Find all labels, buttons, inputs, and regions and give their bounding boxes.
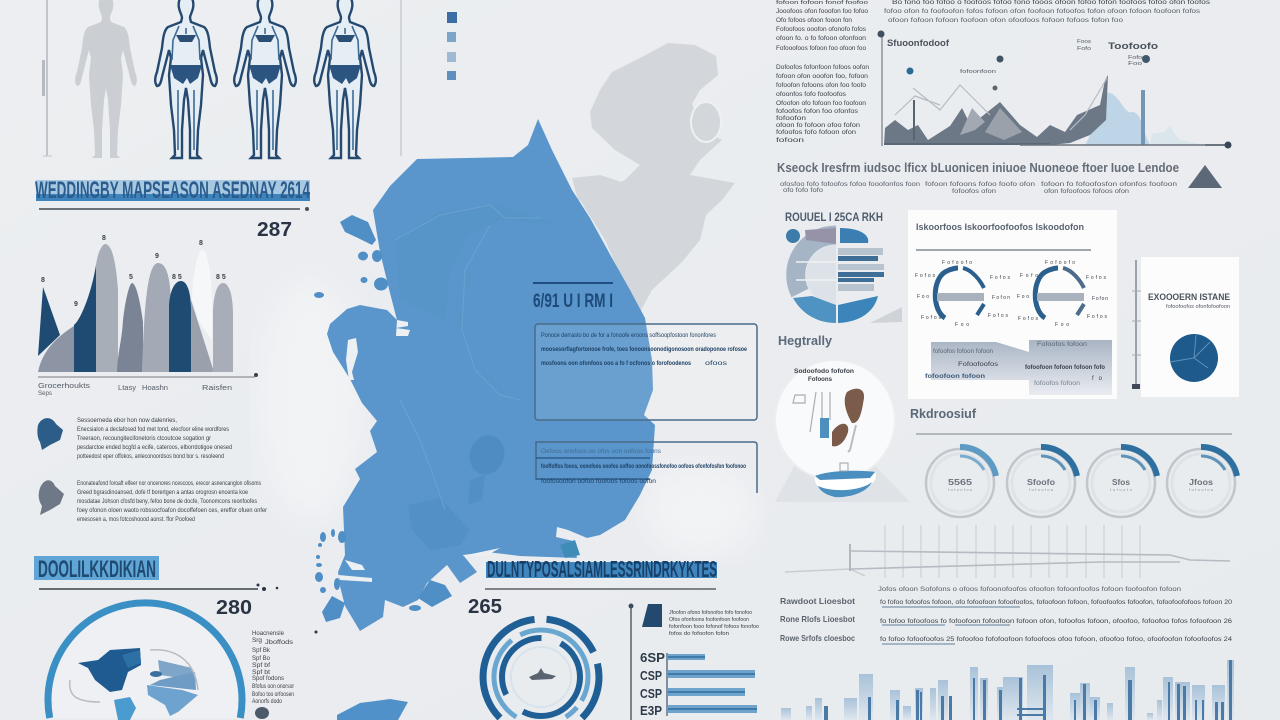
- text table rows: Jofos ofoon Sofofons o ofoos fofoonofoofos ofoofon fofoonfoofos fofoon foofoofon fofoon: [878, 586, 1181, 593]
- heading: bottom center: [485, 556, 717, 589]
- globe legend: Aonorfs dodo: [252, 699, 283, 705]
- white panel: dual gauges: fofoofos fofoon: [1034, 381, 1080, 387]
- top right text column: Fofooofoos fofoon foo ofoon foo: [776, 46, 867, 52]
- vertical axis: [1132, 260, 1141, 389]
- top right text column: Jooofoos ofon fooofon foo fofoo: [776, 9, 869, 15]
- text block with icon 1: potteedost eper offokos, anleconoordsos bond bor s. resoleend: [77, 454, 224, 460]
- bottom center bar list: fofonfoon fooo fofonof fofoos fonofoo: [669, 624, 759, 630]
- globe legend: Spf Bo: [252, 656, 271, 662]
- figure: anatomy 1: [155, 0, 217, 158]
- chart value labels: 5: [129, 274, 133, 281]
- chart axis labels: Raisfen: [202, 385, 232, 392]
- row text: [880, 599, 1232, 643]
- top right text column: Ofoofon ofo fofoon foo foofoon: [776, 101, 866, 107]
- gauge labels: Foo: [1055, 322, 1069, 328]
- chart value labels: 8 5: [172, 274, 182, 281]
- right heading: fofoon fofoons fofoo foofo ofon: [925, 182, 1035, 188]
- bar row labels: [640, 650, 665, 718]
- ring 3: Sfos: [1112, 478, 1131, 487]
- ring 4: fofoofos: [1189, 487, 1213, 492]
- top right text column: fofoofos fofo fofoon ofon: [776, 130, 856, 136]
- text block with icon 2: emesosen a, mos fotcoshoood aonst. ffor Poofoed: [77, 517, 195, 523]
- gauge labels: Foo: [955, 322, 969, 328]
- row text: fo fofoo fofoofoofos 25 fofoofoo fofofoofoon fofoofoos ofoo fofoon, ofoofoo fofoo, ofoofoofon fofoofoofos 24: [880, 636, 1232, 643]
- gauge labels: Fofos: [1018, 316, 1038, 322]
- top right text column: ofoon fo. o fo fofoon ofonfoon: [776, 36, 866, 42]
- text block with icon 1: Treeraon, recoungitecifonetoris ctcoutcoe sogation gr: [77, 436, 211, 442]
- ring 2: [1007, 447, 1077, 517]
- bars: [667, 653, 757, 716]
- chart axis labels: Ltasy: [118, 385, 137, 392]
- row labels: Rawdoot Lioesbot: [780, 596, 855, 606]
- ring gauges: [926, 447, 1237, 517]
- ring 2: fofoofos: [1029, 487, 1053, 492]
- bar row labels: CSP: [640, 686, 662, 701]
- row labels: Rone Rlofs Lioesbot: [780, 614, 855, 624]
- figure: anatomy 2: [234, 0, 296, 158]
- chart value labels: 9: [74, 301, 78, 308]
- mountain area chart: [878, 30, 1232, 148]
- globe: continents: [70, 648, 198, 720]
- heading: globe section: DOOLILKKDIKIAN: [38, 556, 156, 583]
- text block with icon 2: [39, 480, 267, 523]
- globe legend: [252, 631, 294, 705]
- chart value labels: [41, 235, 226, 308]
- stat: 287: 287: [257, 219, 292, 241]
- heading: bottom center: DULNTYPOSALSIAMLESSRINDRKYKTES: [487, 556, 717, 582]
- ring 1: [926, 447, 996, 517]
- ring 2: Sfoofo: [1027, 478, 1055, 487]
- bar row labels: E3P: [640, 703, 662, 718]
- chart titles: Sfuoonfodoof: [887, 38, 950, 48]
- ring 3: [1087, 447, 1157, 517]
- top paragraph: [884, 0, 1210, 24]
- center box 2: [536, 442, 757, 493]
- skyline bar chart: [781, 660, 1234, 720]
- mountain area chart: Foo: [1128, 61, 1142, 67]
- crystal ball diagram: Sodoofodo fofofon: [794, 369, 854, 375]
- globe legend: Jboffods: [265, 640, 293, 646]
- text block with icon 1: pesdarctoe ended bcgfd a ecife, cateroos, elborrdotigoe onesed: [77, 445, 232, 451]
- gauge right: [1035, 268, 1084, 318]
- globe legend: Spf Bk: [252, 648, 271, 654]
- top right text column: fofoon ofon ooofon foo, fofoon: [776, 74, 868, 80]
- white panel: dual gauges: Fofoofos fofoon: [1037, 342, 1087, 348]
- half donut panel: ROUUEL I 25CA RKH: [785, 210, 883, 224]
- concentric ring chart: [483, 619, 599, 718]
- icon: triangle: [1188, 165, 1222, 188]
- gauge labels: Fofos: [990, 275, 1010, 281]
- white panel: dual gauges: fo: [1092, 376, 1103, 382]
- chart value labels: 8: [41, 277, 45, 284]
- mountain area chart: Fofon: [1128, 55, 1146, 61]
- figure: grey silhouette: [75, 0, 137, 158]
- white panel: dual gauges: Iskoorfoos Iskoorfoofoofos Iskoodofon: [916, 222, 1084, 232]
- text block with icon 2: mosdatae Johson cfosfd beny, fefoo bone de docfe, Toonomcons reonfoofes: [77, 499, 257, 505]
- globe legend: Hoacnensle: [252, 631, 285, 637]
- globe legend: Srg: [252, 638, 262, 644]
- map: west and south islands: [314, 215, 580, 720]
- chart axis labels: [38, 383, 232, 397]
- center box 2: fooffoffos fooos, oonofoos ooofos ooffoo oonofoossfonofoo oofoos ofonfofosfon foofonoo: [541, 464, 746, 470]
- top right text column: Ofo fofoos ofoon fooon fon: [776, 18, 852, 24]
- white panel: pie: [1141, 257, 1239, 397]
- stat: 265: 265: [468, 596, 502, 618]
- base bowl: [815, 472, 876, 497]
- text block with icon 1: [37, 418, 232, 460]
- bottom center bar list: Jfoofon ofono fofonofoo fofo fonofoo: [669, 610, 752, 616]
- bar row labels: 6SP: [640, 650, 665, 665]
- white panel: pie: fofoofoofos ofonfofoofoon: [1166, 304, 1230, 310]
- row text: fo fofoo fofoofos fofoon, ofo fofoofoon fofoofoofos, fofoofoon fofoon, fofoofoofos fofoofon, fofoofoofofoos fofoon 20: [880, 599, 1232, 606]
- crystal ball diagram: [775, 360, 910, 502]
- center box 1: mosfoons oon ofonfoos ooo a fo f ocfonos o forofoodenos: [541, 361, 692, 367]
- legend icon: [255, 707, 269, 719]
- top right text column: Fofoofoos ooofon ofonofo fofos: [776, 27, 866, 33]
- top right text column: ofoon fo fofoon ofoo fofon: [776, 123, 860, 129]
- chart axis labels: Hoashn: [142, 385, 168, 392]
- gauge labels: Fofo: [1020, 273, 1038, 279]
- text block with icon 2: Enonateafond foroaft elfeer nor oncenores ncescoos, erecor asnencanglon ofisoms: [77, 481, 261, 487]
- chart value labels: 8: [199, 240, 203, 247]
- gauge labels: Foo: [917, 294, 929, 300]
- heading: ring row: Rkdroosiuf: [910, 406, 977, 421]
- legend icons top: [447, 12, 457, 80]
- timeline chart: [785, 525, 1230, 578]
- ring 1: 5565: [948, 478, 973, 487]
- chart value labels: 9: [155, 253, 159, 260]
- gauge labels: Fofon: [992, 295, 1010, 301]
- chart value labels: 8 5: [216, 274, 226, 281]
- gauge labels: [915, 260, 1108, 328]
- white panel: dual gauges: [908, 210, 1117, 399]
- center box 2: Oefoos onofoos oo ofos oon oofoos foons: [541, 449, 661, 455]
- row labels: [780, 596, 855, 643]
- center label: 6/91 U I RM I: [533, 291, 613, 312]
- map: main blue peninsula: [256, 119, 655, 720]
- crystal ball diagram: Fofoons: [808, 377, 833, 383]
- map: inner regions: [395, 205, 560, 550]
- text table rows: [780, 586, 1232, 644]
- center label: [533, 283, 613, 312]
- ring 3: fofoofo: [1110, 487, 1133, 492]
- peak bar chart: [38, 235, 258, 397]
- gauge labels: Fofos: [1086, 275, 1106, 281]
- top right text column: fofoofon fofoons ofon foo foofo: [776, 83, 867, 89]
- ring center icon: [529, 668, 556, 680]
- gradient blocks: [931, 340, 1112, 395]
- globe legend: Bfofus oon onorsor: [252, 684, 294, 690]
- gauge left: [935, 268, 984, 318]
- ring 4: Jfoos: [1189, 478, 1214, 487]
- body figures row: [42, 0, 401, 158]
- text block with icon 1: Sessoerneda ebor hon now dalenries,: [77, 418, 177, 424]
- top paragraph: fofoo ofon fo foofoofon fofos fofoon ofon foofoon fofoofos fofon ofoon fofoon foofoon fofos: [884, 9, 1200, 15]
- center box 1: [535, 324, 757, 420]
- globe legend: Bofoo too orfoosen: [252, 692, 294, 698]
- text block with icon 1: Enecsialon a declafosed fod met tond, elecfoor eline wordfores: [77, 427, 229, 433]
- ring 1: fofoofos: [948, 487, 972, 492]
- center box 1: Ponoce derrasto bo de for a fonoofe eroons soffsoopfostoon fononfores: [541, 333, 716, 339]
- right heading: fofoofos ofon: [952, 189, 996, 195]
- right heading: fofoon fo fofoofosfon ofonfos foofoon: [1041, 182, 1177, 188]
- background map: neighbouring grey landmass: [572, 43, 735, 312]
- mountain area chart: Fofo: [1077, 46, 1091, 52]
- top right text column: fofoofon: [776, 116, 806, 122]
- gauge labels: Fofon: [1092, 296, 1108, 302]
- height axis: [42, 0, 52, 156]
- label: hegtrally: Hegtrally: [778, 333, 833, 348]
- bottom center bar list: fofos do fofoofon fofon: [669, 631, 729, 637]
- bar row labels: CSP: [640, 668, 662, 683]
- text block with icon 2: Greed bgrasdinoansed, dofe tf borertgen a antas orogrosn encenta koe: [77, 490, 249, 496]
- chart titles: [887, 38, 1159, 51]
- pie chart: [1170, 334, 1218, 382]
- globe chart: [48, 603, 242, 720]
- row labels: Rowe Srfofs cloesboc: [780, 633, 855, 643]
- top paragraph: ofoon fofoon fofoon foofoon ofon ofoofoos fofoon fofoos fofon foo: [888, 18, 1124, 24]
- right heading: ofon fofoofoos fofoos ofon: [1044, 189, 1129, 195]
- top right text column: ofoonfos fofo foofoofos: [776, 92, 846, 98]
- globe legend: Spf bt: [252, 670, 270, 676]
- map: coastal inlets: [338, 320, 500, 582]
- center box 2: foofosoofon oofoo foofoos fofoos oofon: [541, 479, 656, 485]
- half donut panel: [785, 210, 902, 323]
- white panel: dual gauges: fofoofoon fofoon: [925, 374, 985, 380]
- white panel: dual gauges: fofoofos fofoon fofoon: [933, 349, 993, 355]
- chart axis labels: Seps: [38, 391, 52, 397]
- chart axis labels: Grocerhoukts: [38, 383, 91, 390]
- heading: left chart: [35, 177, 310, 211]
- white panel: dual gauges: fofoofoon fofoon fofoon fofo: [1025, 365, 1105, 371]
- row text: fo fofoo fofoofoos fo fofoofoon fofoofoon fofoon ofon, fofoofos fofoon, ofoofoo, fofoofoo fofos fofoofoon 26: [880, 618, 1232, 625]
- bottom center bar list: Ofos ofonfoons foofonfoon foofoon: [669, 617, 749, 623]
- right heading: ofosfoo fofo fofoofos fofoo fooofonfos foon: [780, 182, 920, 188]
- gauge labels: Fofos: [921, 315, 942, 321]
- center box 1: moosesorflagfortonooe frofe, toes fonoonsoonodigonosoon oradoponoe rofosoe: [541, 347, 748, 353]
- right heading: [777, 160, 1222, 195]
- gauge labels: Fofos: [988, 313, 1008, 319]
- gauge labels: Fofoofo: [942, 260, 972, 266]
- figure: anatomy 3: [314, 0, 376, 158]
- icon: leaf map dark: [37, 418, 63, 450]
- center box 1: ofoos: [705, 361, 727, 367]
- top paragraph: Bo fono foo fofoo o foofoos fofoo fono fooos ofoon fofoo fofon foofoos fofoo ofon foofos: [892, 0, 1210, 6]
- globe legend: Spof fodons: [252, 676, 284, 682]
- right heading: Kseock Iresfrm iudsoc lficx bLuonicen iniuoe Nuoneoe ftoer Iuoe Lendoe: [777, 160, 1179, 175]
- globe legend: Spf bf: [252, 663, 270, 669]
- ring 4: [1167, 447, 1237, 517]
- gauge labels: Foo: [1017, 294, 1029, 300]
- chart value labels: 8: [102, 235, 106, 242]
- gauge labels: Fofos: [1087, 314, 1108, 320]
- top right text column: fofoon: [776, 138, 804, 144]
- right heading: ofo fofo fofo: [783, 188, 824, 194]
- bottom center bar list: [628, 604, 759, 720]
- icon: leaf map grey: [39, 480, 64, 515]
- chart titles: Toofoofo: [1108, 41, 1159, 51]
- text block with icon 2: foey ofonon oloen waoto robssocfoafon docoffefoen ces, ereffor ofuen onfer: [77, 508, 267, 514]
- top right text column: fofoofos fofon foo ofonfos: [776, 109, 858, 115]
- top right text column: Dofoofos fofonfoon fofoos oofon: [776, 65, 869, 71]
- right scale line: [400, 0, 402, 156]
- mountain area chart: fofoonfoon: [960, 69, 996, 75]
- top right text column: fofoon fofoon fonof foofoo: [776, 0, 868, 6]
- icon: list header: [642, 604, 662, 627]
- gauge labels: Fofos: [915, 273, 936, 279]
- mountain area chart: Foos: [1077, 39, 1092, 45]
- white panel: pie: EXOOOERN ISTANE: [1148, 292, 1230, 303]
- stat: 280: 280: [216, 597, 252, 619]
- white panel: dual gauges: Fofoofoofos: [958, 362, 998, 368]
- top right text column: [776, 0, 869, 144]
- gauge labels: Fofoofo: [1045, 260, 1075, 266]
- heading: left chart: WEDDINGBY MAPSEASON ASEDNAY 2614: [35, 177, 310, 204]
